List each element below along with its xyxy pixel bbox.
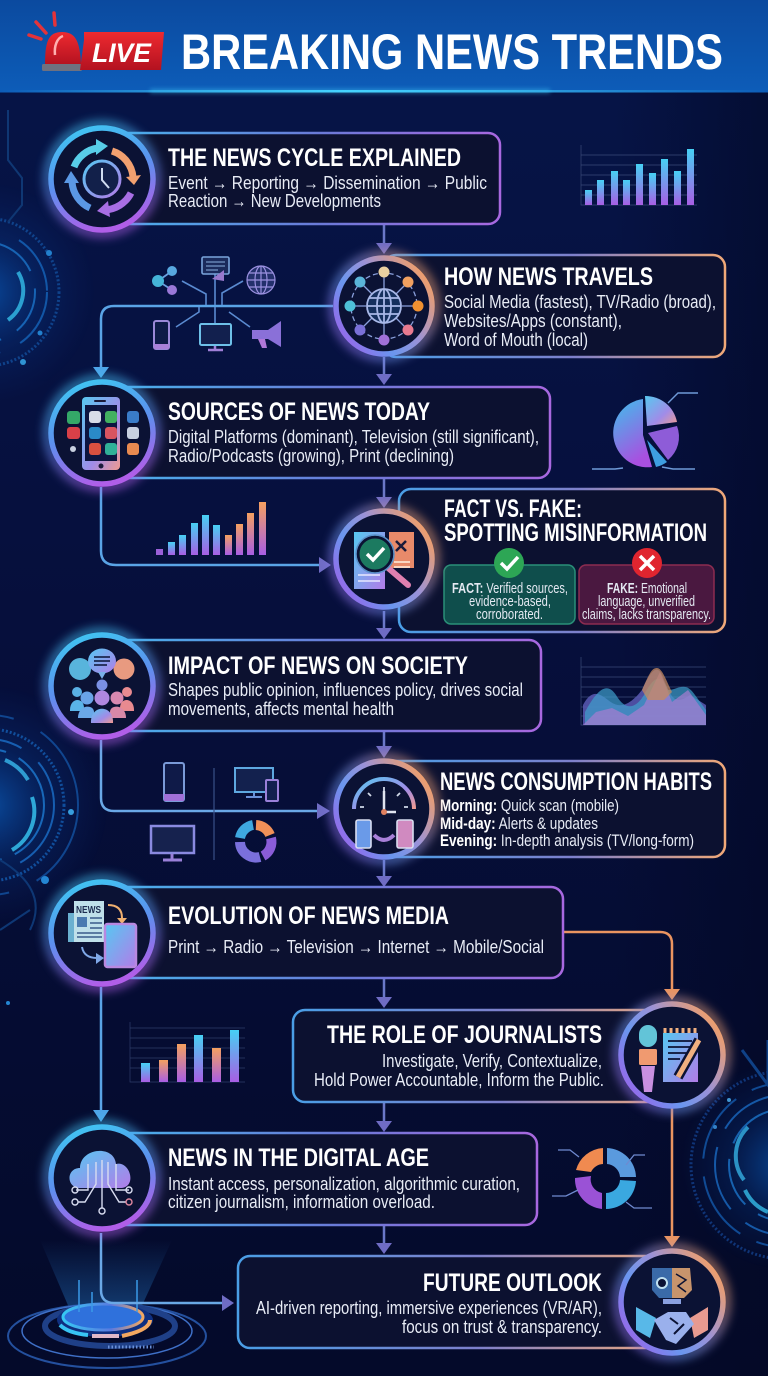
icon: small donut [240, 825, 271, 858]
body text: Digital Platforms (dominant), Television (still significant), [168, 427, 539, 447]
panel: the news cycle explained [48, 125, 500, 233]
icon: smartphone with apps [48, 379, 156, 487]
body text: citizen journalism, information overload. [168, 1192, 435, 1212]
fact card: corroborated. [476, 607, 543, 623]
fact card: FACT: Verified sources, [452, 581, 568, 597]
panel: future outlook [238, 1248, 726, 1356]
body text: Social Media (fastest), TV/Radio (broad), [444, 292, 716, 312]
icon: magnifier over documents [333, 508, 435, 610]
icon: document [202, 257, 229, 281]
icon: monitor [200, 324, 231, 350]
body text [168, 1174, 520, 1212]
body text [168, 173, 487, 211]
decorative HUD: upper left [0, 110, 95, 402]
body text: focus on trust & transparency. [402, 1317, 602, 1337]
heading: NEWS IN THE DIGITAL AGE [168, 1144, 429, 1172]
heading: HOW NEWS TRAVELS [444, 263, 653, 291]
fake card: language, unverified [598, 594, 695, 610]
heading: FACT VS. FAKE: [444, 495, 582, 523]
icon: newspaper to tablet [48, 879, 156, 987]
chart: bars, middle left [130, 1022, 245, 1082]
icon: siren [29, 13, 82, 71]
body text: Hold Power Accountable, Inform the Public. [314, 1070, 604, 1090]
icon: phone [154, 321, 169, 349]
body text: Mid-day: Alerts & updates [440, 814, 598, 833]
heading: THE NEWS CYCLE EXPLAINED [168, 144, 461, 172]
icon: share [152, 266, 177, 295]
body text: Reaction → New Developments [168, 191, 381, 211]
icon: desktop monitor [151, 826, 194, 860]
body text: Instant access, personalization, algorithmic curation, [168, 1174, 520, 1194]
connector arrows [93, 224, 680, 1311]
body text [444, 292, 716, 350]
body text: Event → Reporting → Dissemination → Public [168, 173, 487, 193]
icon: check badge [494, 548, 524, 578]
panel: how news travels [333, 255, 725, 357]
icon: clock with devices [333, 758, 435, 860]
icon: robot and handshake [618, 1248, 726, 1356]
heading: SOURCES OF NEWS TODAY [168, 398, 430, 426]
fact card: evidence-based, [469, 594, 551, 610]
body text: movements, affects mental health [168, 699, 394, 719]
body text: Radio/Podcasts (growing), Print (declining) [168, 446, 454, 466]
body text: Morning: Quick scan (mobile) [440, 796, 619, 815]
body text [314, 1051, 604, 1090]
live tag [80, 32, 164, 70]
icon: phone [164, 763, 184, 801]
chart: donut [552, 1148, 652, 1209]
icon: globe network [333, 255, 435, 357]
icon: clock cycle [48, 125, 156, 233]
icon: newspaper to tablet: NEWS [76, 905, 101, 916]
body text: Investigate, Verify, Contextualize, [382, 1051, 602, 1071]
chart: bars, top right [581, 145, 697, 205]
fake card: FAKE: Emotional [607, 581, 687, 597]
body text [168, 680, 523, 719]
heading: FUTURE OUTLOOK [423, 1269, 602, 1297]
body text: Print → Radio → Television → Internet → Mobile/Social [168, 937, 544, 957]
panel: impact of news on society [48, 632, 541, 740]
panel: the role of journalists [293, 1001, 726, 1109]
icon: cloud circuit [48, 1124, 156, 1232]
fact card [444, 548, 575, 624]
device icons group [151, 763, 278, 860]
decorative holographic platform [8, 1240, 206, 1368]
chart: pie [592, 393, 698, 469]
fake card: claims, lacks transparency. [582, 607, 711, 623]
body text [440, 796, 694, 850]
panel: news in the digital age [48, 1124, 537, 1232]
heading [444, 495, 707, 547]
panel: news consumption habits [333, 758, 725, 860]
body text [256, 1298, 602, 1337]
heading: EVOLUTION OF NEWS MEDIA [168, 902, 449, 930]
live tag: LIVE [92, 38, 152, 68]
heading: THE ROLE OF JOURNALISTS [327, 1021, 602, 1049]
decorative HUD: lower right [680, 1040, 768, 1270]
icon: cross badge [632, 548, 662, 578]
body text: Shapes public opinion, influences policy, drives social [168, 680, 523, 700]
header banner [0, 0, 768, 93]
chart: area [581, 657, 706, 725]
body text: Websites/Apps (constant), [444, 311, 622, 331]
body text: AI-driven reporting, immersive experiences (VR/AR), [256, 1298, 602, 1318]
body text: Evening: In-depth analysis (TV/long-form) [440, 831, 694, 850]
chart: growth bars [156, 502, 266, 555]
decorative HUD: middle left [0, 685, 108, 1005]
panel: fact vs fake [333, 489, 725, 632]
icon: crowd with speech bubbles [48, 632, 156, 740]
network of media icons [152, 257, 281, 350]
icon: globe [247, 266, 275, 294]
body text: Word of Mouth (local) [444, 330, 588, 350]
panel: evolution of news media [48, 879, 563, 987]
body text [168, 427, 539, 466]
icon: monitor and tablet [235, 768, 278, 801]
icon: microphone and notepad [618, 1001, 726, 1109]
fake card [579, 548, 714, 624]
panel: sources of news today [48, 379, 550, 487]
heading: IMPACT OF NEWS ON SOCIETY [168, 652, 468, 680]
icon: megaphone [252, 321, 281, 348]
